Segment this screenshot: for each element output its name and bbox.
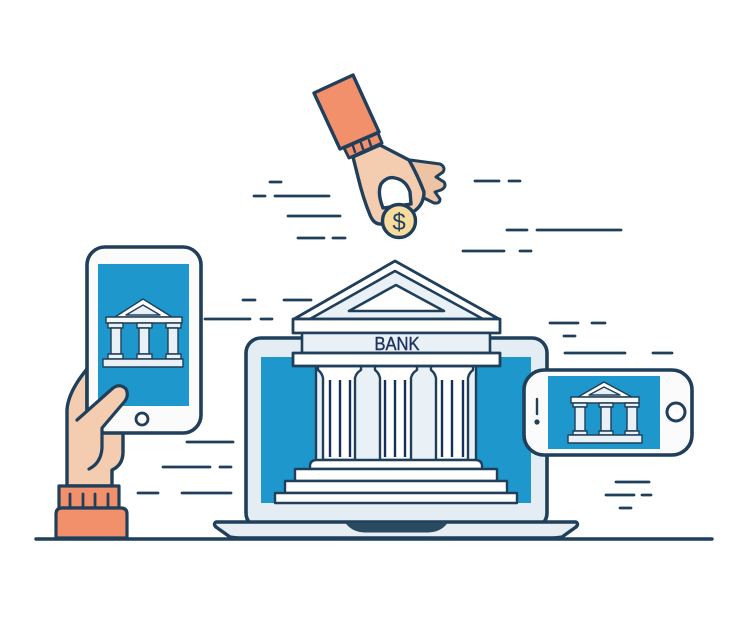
speed dashes: top right xyxy=(463,181,621,251)
thumb outline xyxy=(77,386,127,469)
upper cuff xyxy=(59,486,119,508)
dollar sign: $ xyxy=(392,209,406,236)
mini bank on phone xyxy=(103,299,183,367)
frieze xyxy=(302,333,490,353)
column 2 xyxy=(375,366,417,460)
pediment xyxy=(294,261,499,319)
laptop lid xyxy=(246,338,547,528)
speed dashes: left of bank xyxy=(205,300,311,319)
cuff ribs xyxy=(353,140,371,152)
camera dot xyxy=(534,419,540,425)
pediment inner xyxy=(310,271,483,319)
bank label: BANK xyxy=(374,334,420,354)
phone screen xyxy=(98,264,189,406)
step 3 xyxy=(275,493,517,503)
sleeve xyxy=(314,75,379,149)
bank building xyxy=(275,261,517,503)
speaker xyxy=(536,399,538,414)
home button xyxy=(136,413,148,425)
column 3 xyxy=(431,366,473,460)
ground line xyxy=(36,537,712,541)
lower cuff xyxy=(56,508,127,538)
speed dashes: lower left xyxy=(138,442,233,493)
back fingers xyxy=(410,160,445,203)
cornice xyxy=(293,319,500,333)
lower cornice xyxy=(293,353,500,366)
laptop xyxy=(214,338,578,538)
speed dashes: lower right xyxy=(606,482,651,508)
laptop screen xyxy=(261,357,531,503)
cuff xyxy=(344,133,382,158)
stylobate xyxy=(310,460,482,469)
step 1 xyxy=(295,469,497,481)
column 1 xyxy=(318,366,361,460)
left phone in hand xyxy=(56,247,201,538)
hand xyxy=(353,145,424,224)
mini bank on phone xyxy=(568,382,642,443)
wrist and palm xyxy=(67,369,123,486)
colonnade wall xyxy=(316,366,476,461)
laptop notch xyxy=(346,523,447,532)
coin xyxy=(382,204,416,238)
pediment tympanum xyxy=(349,285,444,311)
home button xyxy=(667,403,685,421)
speed dashes: upper right xyxy=(550,323,672,353)
phone body xyxy=(87,247,201,433)
phone screen xyxy=(548,376,660,449)
thumb fill xyxy=(72,386,127,470)
step 2 xyxy=(285,481,507,493)
top hand with coin xyxy=(314,75,445,238)
laptop base xyxy=(214,522,578,538)
speed dashes: top left xyxy=(254,182,345,238)
right phone xyxy=(524,370,692,455)
phone body xyxy=(524,370,692,455)
cuff ribs xyxy=(70,494,108,508)
